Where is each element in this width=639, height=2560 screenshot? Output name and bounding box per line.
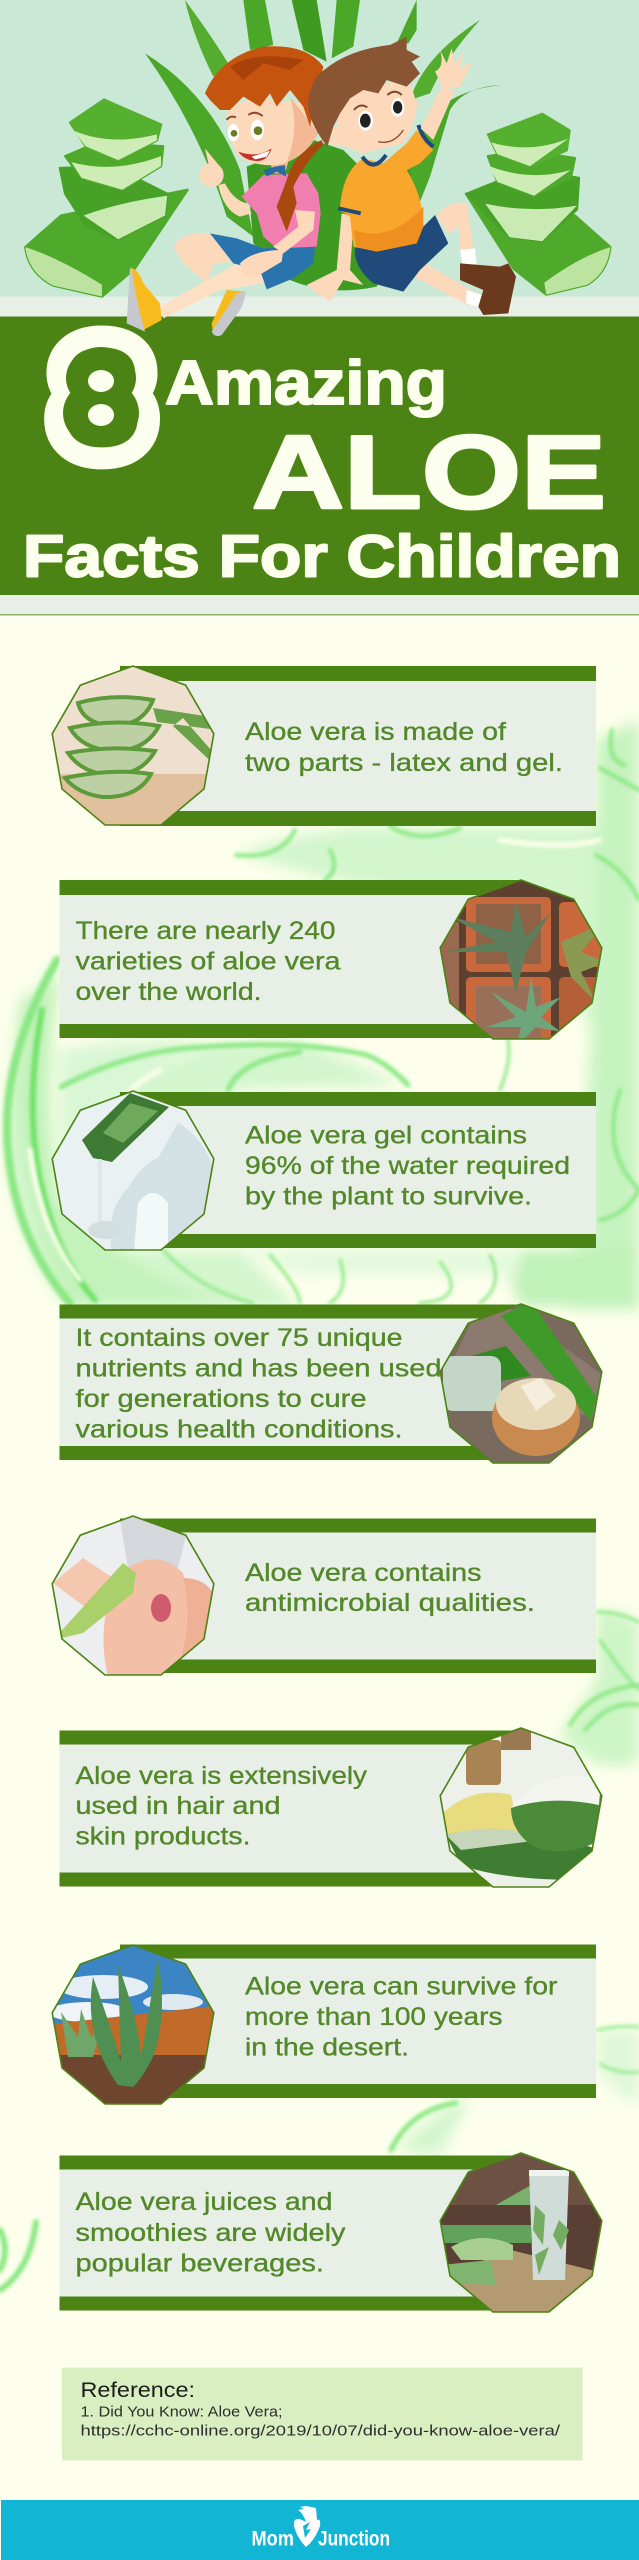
header pale band bbox=[0, 296, 639, 318]
footer bar bbox=[1, 2500, 639, 2560]
icon: aloe plant bbox=[145, 0, 502, 290]
title line Facts For Children: Facts For Children bbox=[23, 524, 621, 590]
header mint background bbox=[0, 0, 639, 297]
header illustration: aloe slices bbox=[25, 100, 610, 297]
photo: aloe juice glass bbox=[439, 2152, 603, 2313]
fact text: Aloe vera contains bbox=[245, 1559, 482, 1587]
card frame bbox=[120, 1092, 596, 1248]
logo: MomJunction bbox=[252, 2506, 390, 2550]
card frame bbox=[120, 666, 596, 826]
fact text: antimicrobial qualities. bbox=[245, 1589, 535, 1617]
fact text bbox=[76, 1762, 368, 1850]
reference citation bbox=[80, 2404, 561, 2440]
title word Amazing: Amazing bbox=[165, 349, 447, 418]
card frame bbox=[120, 1944, 596, 2098]
fact text: Aloe vera is extensively bbox=[76, 1762, 368, 1790]
lower header band bbox=[0, 595, 639, 616]
panel: fact 6 bbox=[60, 1727, 603, 1888]
reference citation: https://cchc-online.org/2019/10/07/did-you-know-aloe-vera/ bbox=[80, 2424, 561, 2440]
fact text bbox=[245, 1559, 535, 1617]
fact text: by the plant to survive. bbox=[245, 1182, 532, 1210]
fact text: varieties of aloe vera bbox=[76, 948, 341, 976]
title word ALOE: ALOE bbox=[252, 415, 606, 531]
fact text bbox=[245, 1972, 558, 2062]
fact text: smoothies are widely bbox=[76, 2219, 346, 2247]
fact text: popular beverages. bbox=[76, 2250, 324, 2278]
panel: fact 1 bbox=[51, 665, 596, 826]
icon: right aloe slices bbox=[466, 114, 610, 295]
photo: aloe gel bowl and jar bbox=[440, 1303, 603, 1464]
card frame bbox=[60, 880, 520, 1038]
logo: MomJunction: Mom bbox=[252, 2528, 294, 2550]
header illustration: kids and aloe plant bbox=[127, 0, 516, 336]
photo: aloe slices stack bbox=[51, 665, 215, 826]
photo: potted aloe plants bbox=[439, 879, 603, 1040]
fact text bbox=[76, 1324, 442, 1444]
panel: fact 8 bbox=[60, 2152, 603, 2313]
fact text: in the desert. bbox=[245, 2034, 409, 2062]
panel: fact 4 bbox=[60, 1303, 603, 1464]
fact text: Aloe vera can survive for bbox=[245, 1972, 558, 2000]
fact text bbox=[76, 2188, 346, 2278]
numeral 8: 8 bbox=[62, 318, 142, 476]
reference heading: Reference: bbox=[80, 2379, 195, 2402]
panel: reference bbox=[62, 2368, 582, 2460]
fact text: used in hair and bbox=[76, 1792, 280, 1820]
card frame bbox=[60, 2156, 520, 2310]
fact text: 96% of the water required bbox=[245, 1152, 570, 1180]
card frame bbox=[120, 1518, 596, 1673]
background green gel splash bbox=[0, 720, 639, 2290]
card frame bbox=[60, 1304, 520, 1460]
fact text: Aloe vera is made of bbox=[245, 718, 506, 746]
fact text: skin products. bbox=[76, 1822, 250, 1850]
photo: aloe leaf dripping gel bbox=[51, 1090, 215, 1251]
fact text: Aloe vera gel contains bbox=[245, 1122, 527, 1150]
fact text bbox=[76, 917, 341, 1006]
fact text: various health conditions. bbox=[76, 1416, 402, 1444]
fact text bbox=[245, 718, 563, 777]
logo: MomJunction: Junction bbox=[318, 2528, 390, 2550]
photo: aloe plant in desert bbox=[51, 1944, 215, 2105]
panel: fact 5 bbox=[51, 1515, 596, 1676]
fact text: nutrients and has been used bbox=[76, 1354, 442, 1382]
photo: aloe slices and oil bottles bbox=[439, 1727, 603, 1888]
girl bbox=[127, 46, 323, 336]
icon: left aloe slices bbox=[25, 100, 188, 297]
title panel bbox=[0, 316, 639, 595]
fact text: over the world. bbox=[76, 978, 262, 1006]
fact text: There are nearly 240 bbox=[76, 917, 336, 945]
photo: aloe applied on knee bbox=[51, 1515, 215, 1676]
fact text: It contains over 75 unique bbox=[76, 1324, 402, 1352]
panel: fact 7 bbox=[51, 1944, 596, 2105]
card frame bbox=[60, 1730, 520, 1886]
panel: fact 3 bbox=[51, 1090, 596, 1251]
panel: fact 2 bbox=[60, 879, 603, 1040]
fact text bbox=[245, 1122, 570, 1210]
fact text: more than 100 years bbox=[245, 2003, 502, 2031]
fact text: two parts - latex and gel. bbox=[245, 749, 563, 777]
boy bbox=[307, 37, 516, 315]
fact text: Aloe vera juices and bbox=[76, 2188, 332, 2216]
reference citation: 1. Did You Know: Aloe Vera; bbox=[80, 2404, 282, 2420]
fact text: for generations to cure bbox=[76, 1385, 366, 1413]
